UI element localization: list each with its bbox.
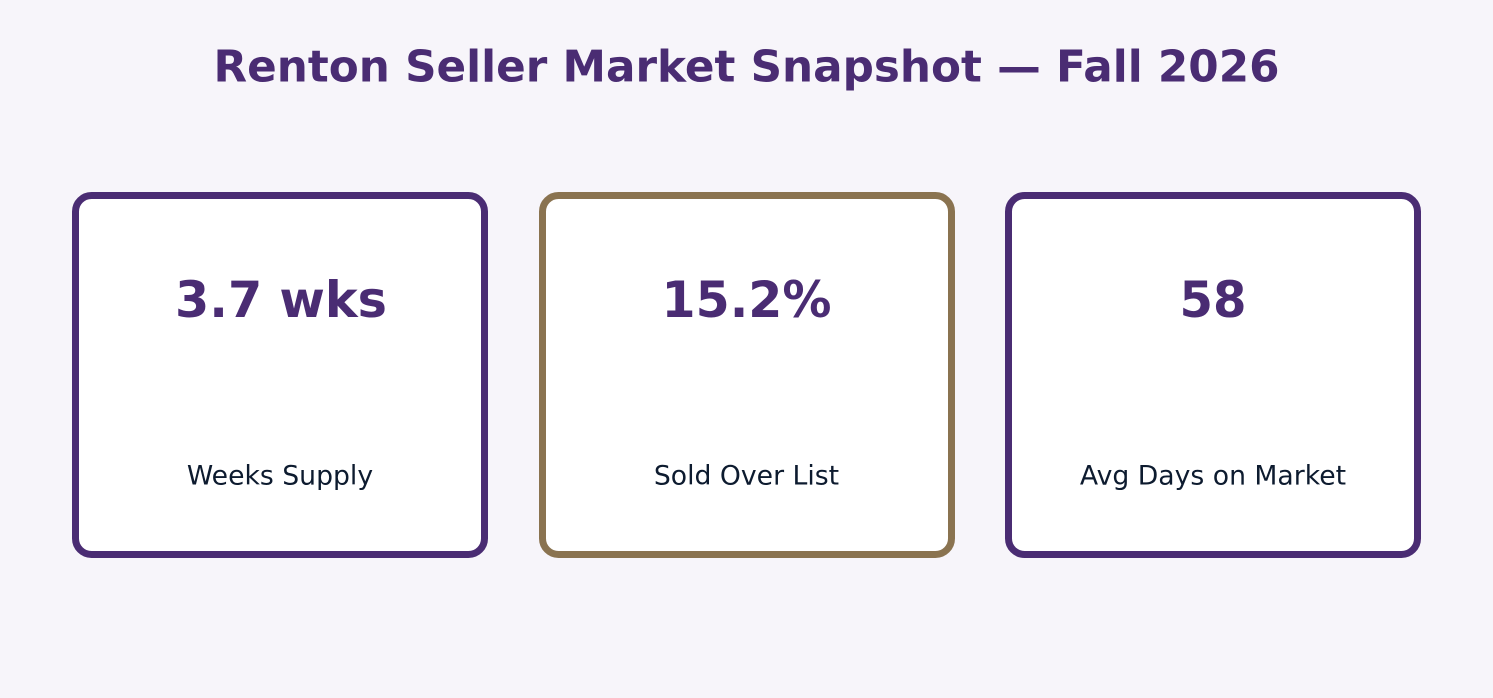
card frame: sold over list	[542, 196, 952, 554]
title: Renton Seller Market Snapshot — Fall 2026	[214, 42, 1280, 92]
panel: weeks supply	[76, 196, 484, 554]
value: average days on market: 58	[1180, 271, 1246, 329]
value: sold over list: 15.2%	[662, 271, 832, 329]
panel: sold over list	[542, 196, 952, 554]
card frame: average days on market	[1008, 196, 1418, 554]
label: weeks supply: Weeks Supply	[187, 460, 373, 492]
panel: average days on market	[1008, 196, 1418, 554]
label: average days on market: Avg Days on Market	[1080, 460, 1346, 492]
card frame: weeks supply	[76, 196, 484, 554]
label: sold over list: Sold Over List	[654, 460, 839, 492]
value: weeks supply: 3.7 wks	[175, 271, 387, 329]
